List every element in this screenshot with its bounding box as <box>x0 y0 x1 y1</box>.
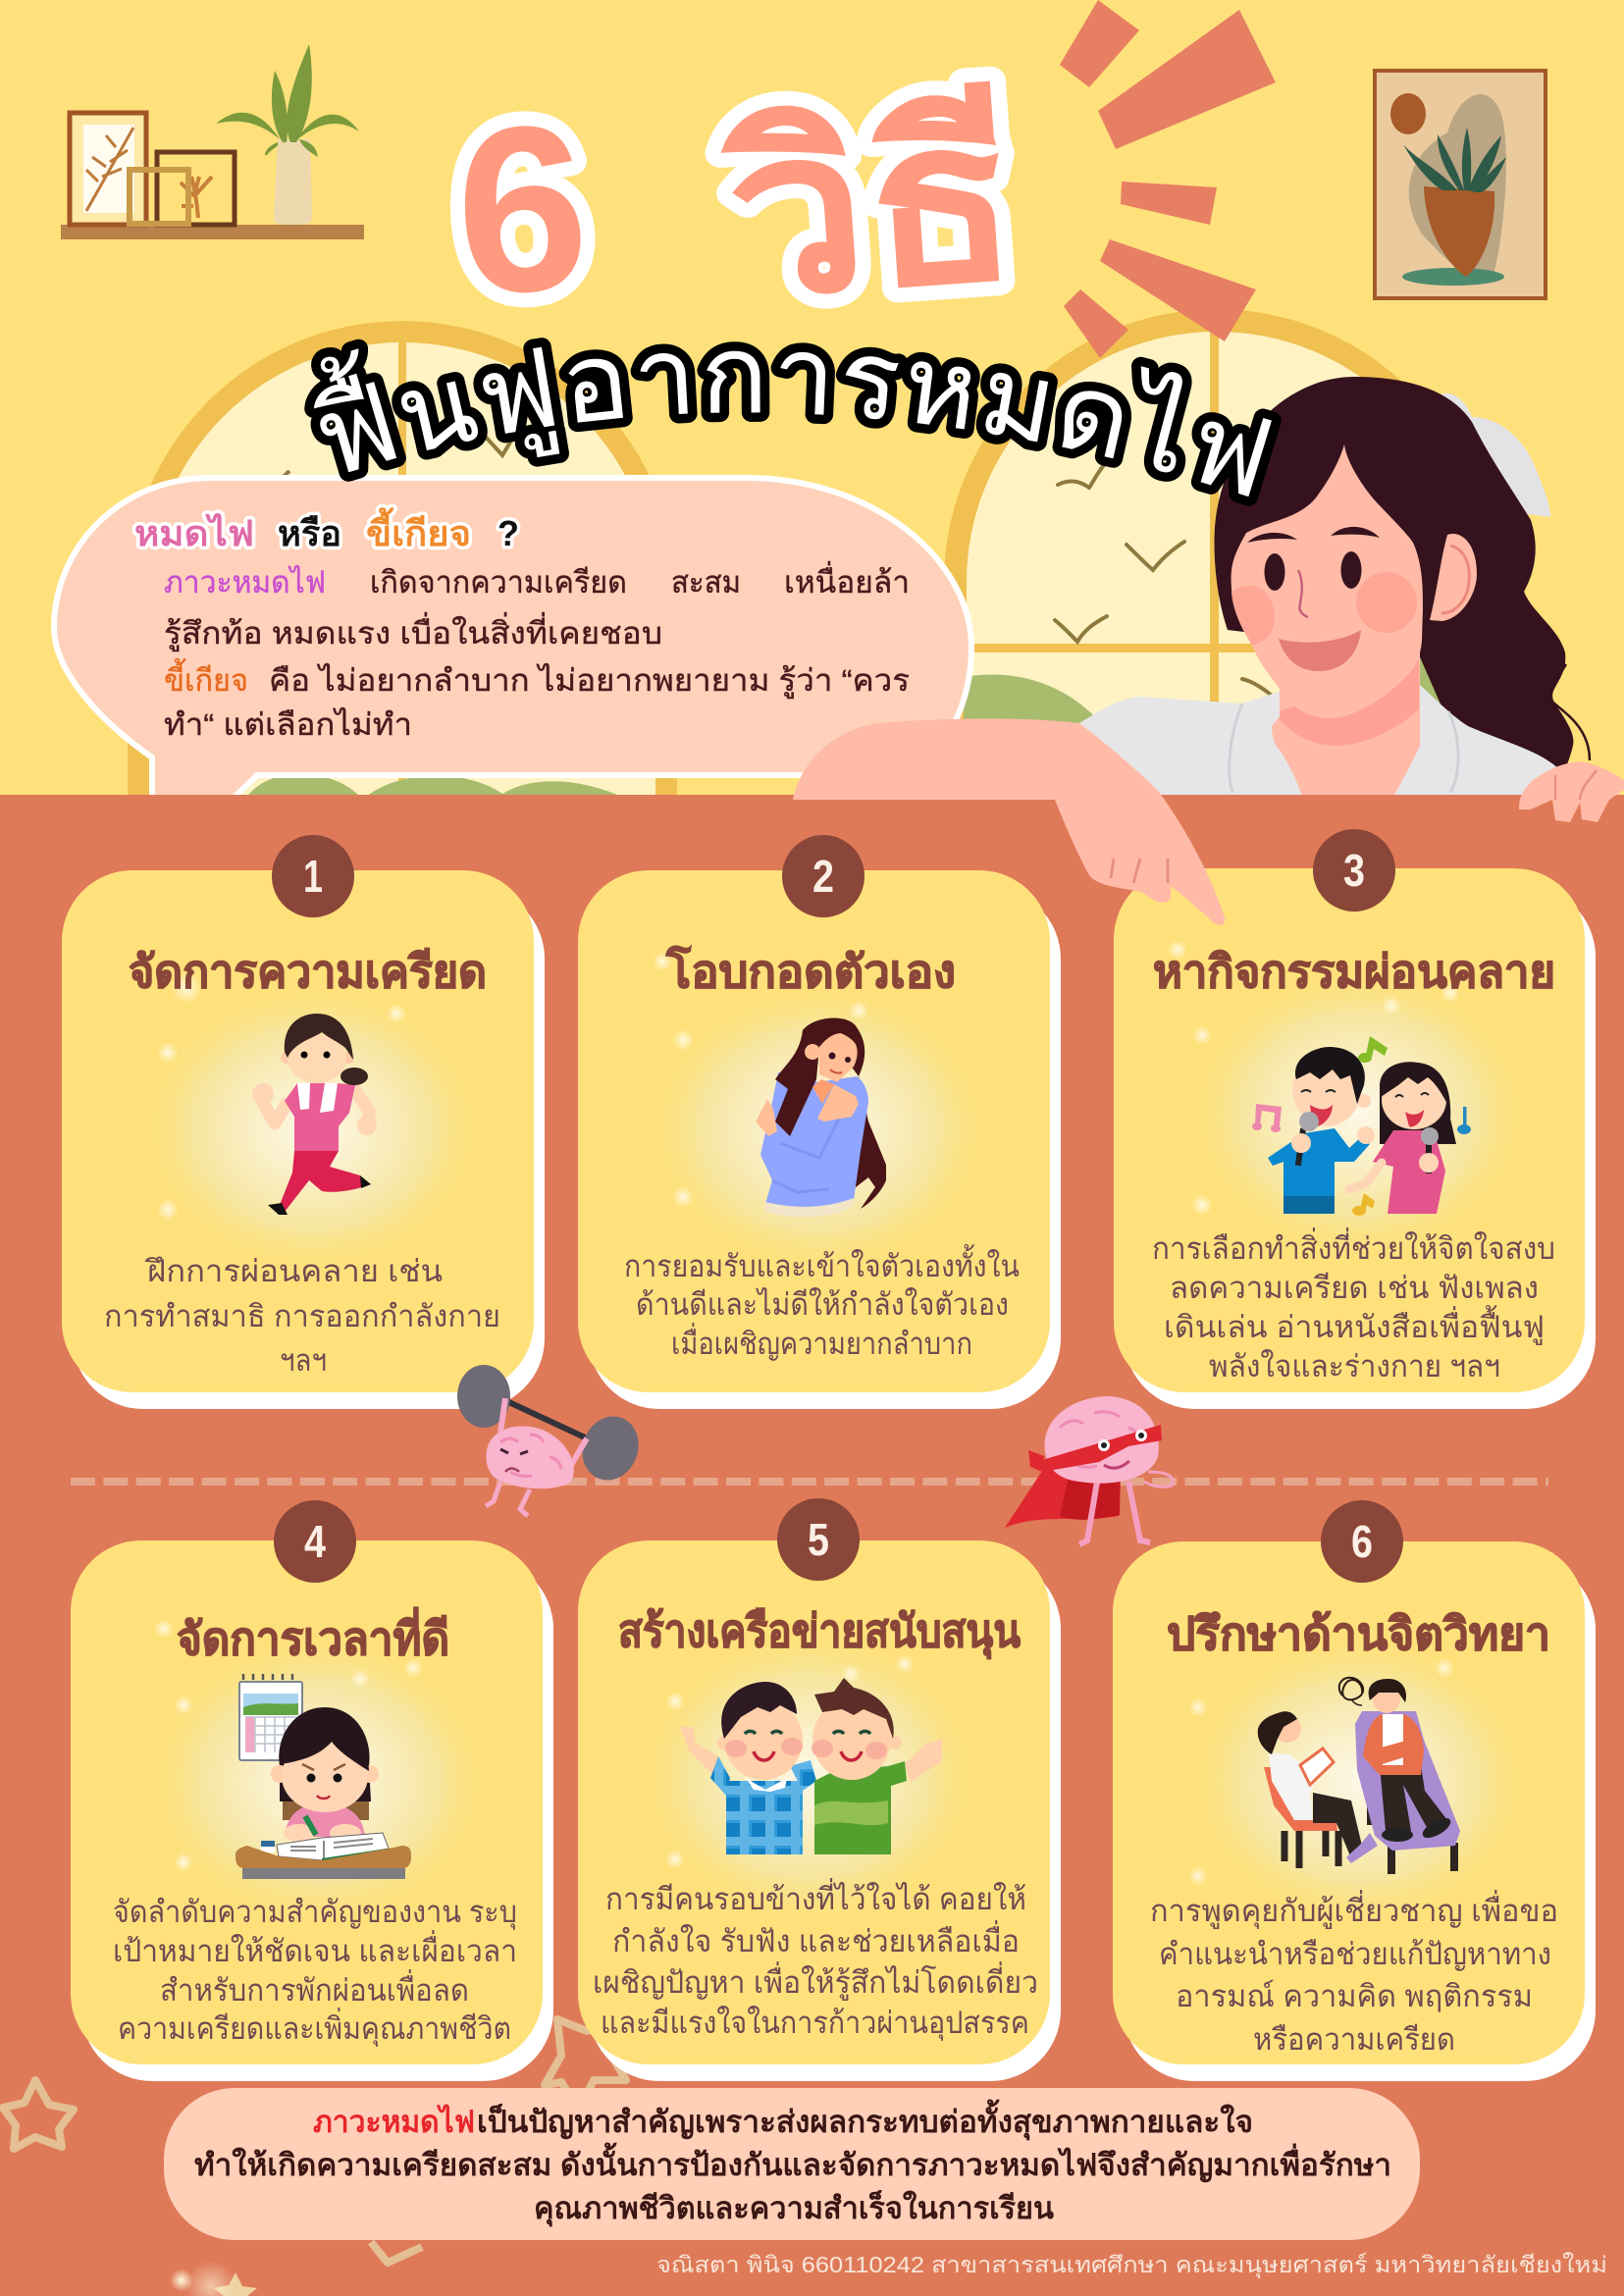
boy <box>1268 1128 1370 1214</box>
bubble heading: หมดไฟ <box>134 512 254 553</box>
text: ฟื้นฟูอาการหมดไฟ <box>304 338 1282 506</box>
title: way (Thai): วิธี <box>716 71 1025 345</box>
icon: therapist and patient <box>1258 1678 1460 1874</box>
speech bubble: burnout or laziness <box>54 478 971 800</box>
badge 3: 3 <box>1343 845 1365 896</box>
woman illustration <box>1074 377 1590 800</box>
girl <box>1380 1062 1456 1144</box>
nose and mouth <box>1298 570 1308 617</box>
icon: woman jogging <box>252 1014 377 1215</box>
icon: superhero brain with cape <box>1005 1396 1173 1544</box>
heading 5: สร้างเครือข่ายสนับสนุน <box>618 1605 1021 1659</box>
dashed divider <box>71 1478 1548 1486</box>
thought scribble <box>1339 1678 1363 1699</box>
icon: brain lifting barbell <box>457 1365 648 1516</box>
icon: two people singing <box>1252 1036 1471 1216</box>
title: 6: 6 <box>449 75 595 343</box>
heading 2: โอบกอดตัวเอง <box>665 945 956 997</box>
woman's left arm and pointing hand <box>793 718 1225 925</box>
body text 6: อารมณ์ ความคิด พฤติกรรม <box>1176 1979 1533 2013</box>
badge 6 <box>1321 1500 1403 1583</box>
bubble body text: สะสม <box>671 565 741 600</box>
body text 6: หรือความเครียด <box>1253 2022 1455 2057</box>
body text 5: และมีแรงใจในการก้าวผ่านอุปสรรค <box>601 2006 1029 2042</box>
body text 6: การพูดคุยกับผู้เชี่ยวชาญ เพื่อขอ <box>1150 1890 1558 1930</box>
bubble body text: เหนื่อยล้า <box>784 561 910 600</box>
eyes and brows <box>1247 527 1380 591</box>
icon: two friends with arms around each other <box>680 1678 942 1854</box>
badge 4: 4 <box>304 1516 326 1567</box>
body text 5 <box>593 1878 1038 2042</box>
bubble body text: คือ ไม่อยากลำบาก ไม่อยากพยายาม รู้ว่า “ควร <box>269 663 910 699</box>
therapist <box>1284 1831 1338 1868</box>
body text 3: พลังใจและร่างกาย ฯลฯ <box>1209 1349 1500 1383</box>
bubble heading: ขี้เกียจ <box>366 507 471 553</box>
body text 2: เมื่อเผชิญความยากลำบาก <box>671 1323 972 1361</box>
background: orange lower panel <box>0 795 1624 2296</box>
panel: card 6 counselling <box>1113 1500 1596 2081</box>
body text 5: กำลังใจ รับฟัง และช่วยเหลือเมื่อ <box>612 1920 1020 1958</box>
heading 1: จัดการความเครียด <box>129 946 487 997</box>
badge 3 <box>1313 829 1395 912</box>
birds <box>1055 453 1271 695</box>
ribbon <box>1438 393 1550 522</box>
bubble body text: ทำ“ แต่เลือกไม่ทำ <box>164 707 412 742</box>
shirt <box>1074 684 1570 800</box>
body text 4: สำหรับการพักผ่อนเพื่อลด <box>160 1969 469 2008</box>
body text 4: จัดลำดับความสำคัญของงาน ระบุ <box>113 1895 517 1931</box>
decorative glow dots <box>170 2261 236 2296</box>
body text 6: คำแนะนำหรือช่วยแก้ปัญหาทาง <box>1159 1937 1551 1971</box>
badge 1: 1 <box>303 851 323 902</box>
sun rays <box>1060 0 1276 358</box>
summary pill: คุณภาพชีวิตและความสำเร็จในการเรียน <box>534 2189 1054 2227</box>
woman's right hand on the ledge <box>1519 761 1624 822</box>
body text 5: การมีคนรอบข้างที่ไว้ใจได้ คอยให้ <box>605 1878 1026 1916</box>
body text 1 <box>104 1254 500 1378</box>
patient <box>1380 1765 1447 1831</box>
couch <box>1371 1800 1454 1874</box>
body text 4 <box>113 1895 517 2048</box>
footer credit: จณิสตา พินิจ 660110242 สาขาสารสนเทศศึกษา คณะมนุษยศาสตร์ มหาวิทยาลัยเชียงใหม่ <box>656 2252 1607 2278</box>
badge 1 <box>272 835 354 917</box>
body text 2: ด้านดีและไม่ดีให้กำลังใจตัวเอง <box>636 1287 1009 1322</box>
summary pill: ภาวะหมดไฟ <box>313 2104 475 2139</box>
heading 6: ปรึกษาด้านจิตวิทยา <box>1167 1608 1550 1659</box>
bubble heading: หรือ <box>278 513 341 553</box>
body text 5: เผชิญปัญหา เพื่อให้รู้สึกไม่โดดเดี่ยว <box>593 1961 1038 2001</box>
bubble body text: ภาวะหมดไฟ <box>164 565 326 600</box>
panel: card 1 stress management <box>62 835 545 1409</box>
neck <box>1272 648 1420 800</box>
heading 4: จัดการเวลาที่ดี <box>177 1607 449 1664</box>
summary pill <box>164 2088 1420 2240</box>
bubble body text: เกิดจากความเครียด <box>370 565 627 600</box>
body text 2: การยอมรับและเข้าใจตัวเองทั้งใน <box>624 1244 1020 1283</box>
body text 1: การทำสมาธิ การออกกำลังกาย <box>104 1299 500 1333</box>
badge 6: 6 <box>1351 1516 1373 1567</box>
blush <box>1231 586 1275 646</box>
bubble body text: ขี้เกียจ <box>164 658 248 698</box>
panel: card 3 relaxing activities <box>1114 829 1596 1409</box>
body text 3: เดินเล่น อ่านหนังสือเพื่อฟื้นฟู <box>1164 1305 1545 1345</box>
icon: girl studying at desk with calendar <box>236 1674 411 1879</box>
badge 4 <box>274 1500 356 1583</box>
badge 5: 5 <box>808 1514 829 1565</box>
body text 3: การเลือกทำสิ่งที่ช่วยให้จิตใจสงบ <box>1152 1227 1555 1266</box>
body text 2 <box>624 1244 1020 1361</box>
body text 6 <box>1150 1890 1558 2057</box>
background: yellow wall <box>0 0 1624 800</box>
ear <box>1430 534 1477 621</box>
icon: shelf with frames and plant <box>61 44 364 239</box>
badge 2 <box>782 835 864 917</box>
left arched window <box>128 321 677 800</box>
bubble body text: รู้สึกท้อ หมดแรง เบื่อในสิ่งที่เคยชอบ <box>164 612 662 652</box>
heading 3: หากิจกรรมผ่อนคลาย <box>1153 946 1555 997</box>
body text 4: เป้าหมายให้ชัดเจน และเผื่อเวลา <box>113 1930 517 1968</box>
badge 2: 2 <box>812 851 834 902</box>
summary pill: ทำให้เกิดความเครียดสะสม ดังนั้นการป้องกันและจัดการภาวะหมดไฟจึงสำคัญมากเพื่อรักษา <box>194 2142 1391 2183</box>
icon: wall painting of a plant <box>1375 71 1545 298</box>
hair <box>1215 377 1573 780</box>
body text 1: ฯลฯ <box>280 1343 327 1378</box>
panel: card 2 self compassion <box>578 835 1061 1409</box>
bubble heading <box>134 507 519 553</box>
body text 3 <box>1152 1227 1555 1383</box>
summary pill: เป็นปัญหาสำคัญเพราะส่งผลกระทบต่อทั้งสุขภาพกายและใจ <box>477 2099 1253 2141</box>
body text 4: ความเครียดและเพิ่มคุณภาพชีวิต <box>118 2008 511 2048</box>
panel: card 5 support network <box>578 1498 1061 2081</box>
panel: card 4 time management <box>71 1500 553 2081</box>
title: curved recovering from burnout <box>329 413 1266 502</box>
bubble body text <box>164 561 910 742</box>
body text 1: ฝึกการผ่อนคลาย เช่น <box>144 1254 443 1288</box>
badge 5 <box>777 1498 860 1581</box>
icon: woman hugging herself <box>756 1018 886 1217</box>
right arched window <box>944 309 1490 800</box>
face <box>1231 444 1423 718</box>
decorative stars <box>3 2019 626 2296</box>
music notes <box>1252 1036 1471 1216</box>
bubble heading: ? <box>498 513 519 553</box>
body text 3: ลดความเครียด เช่น ฟังเพลง <box>1170 1271 1539 1305</box>
